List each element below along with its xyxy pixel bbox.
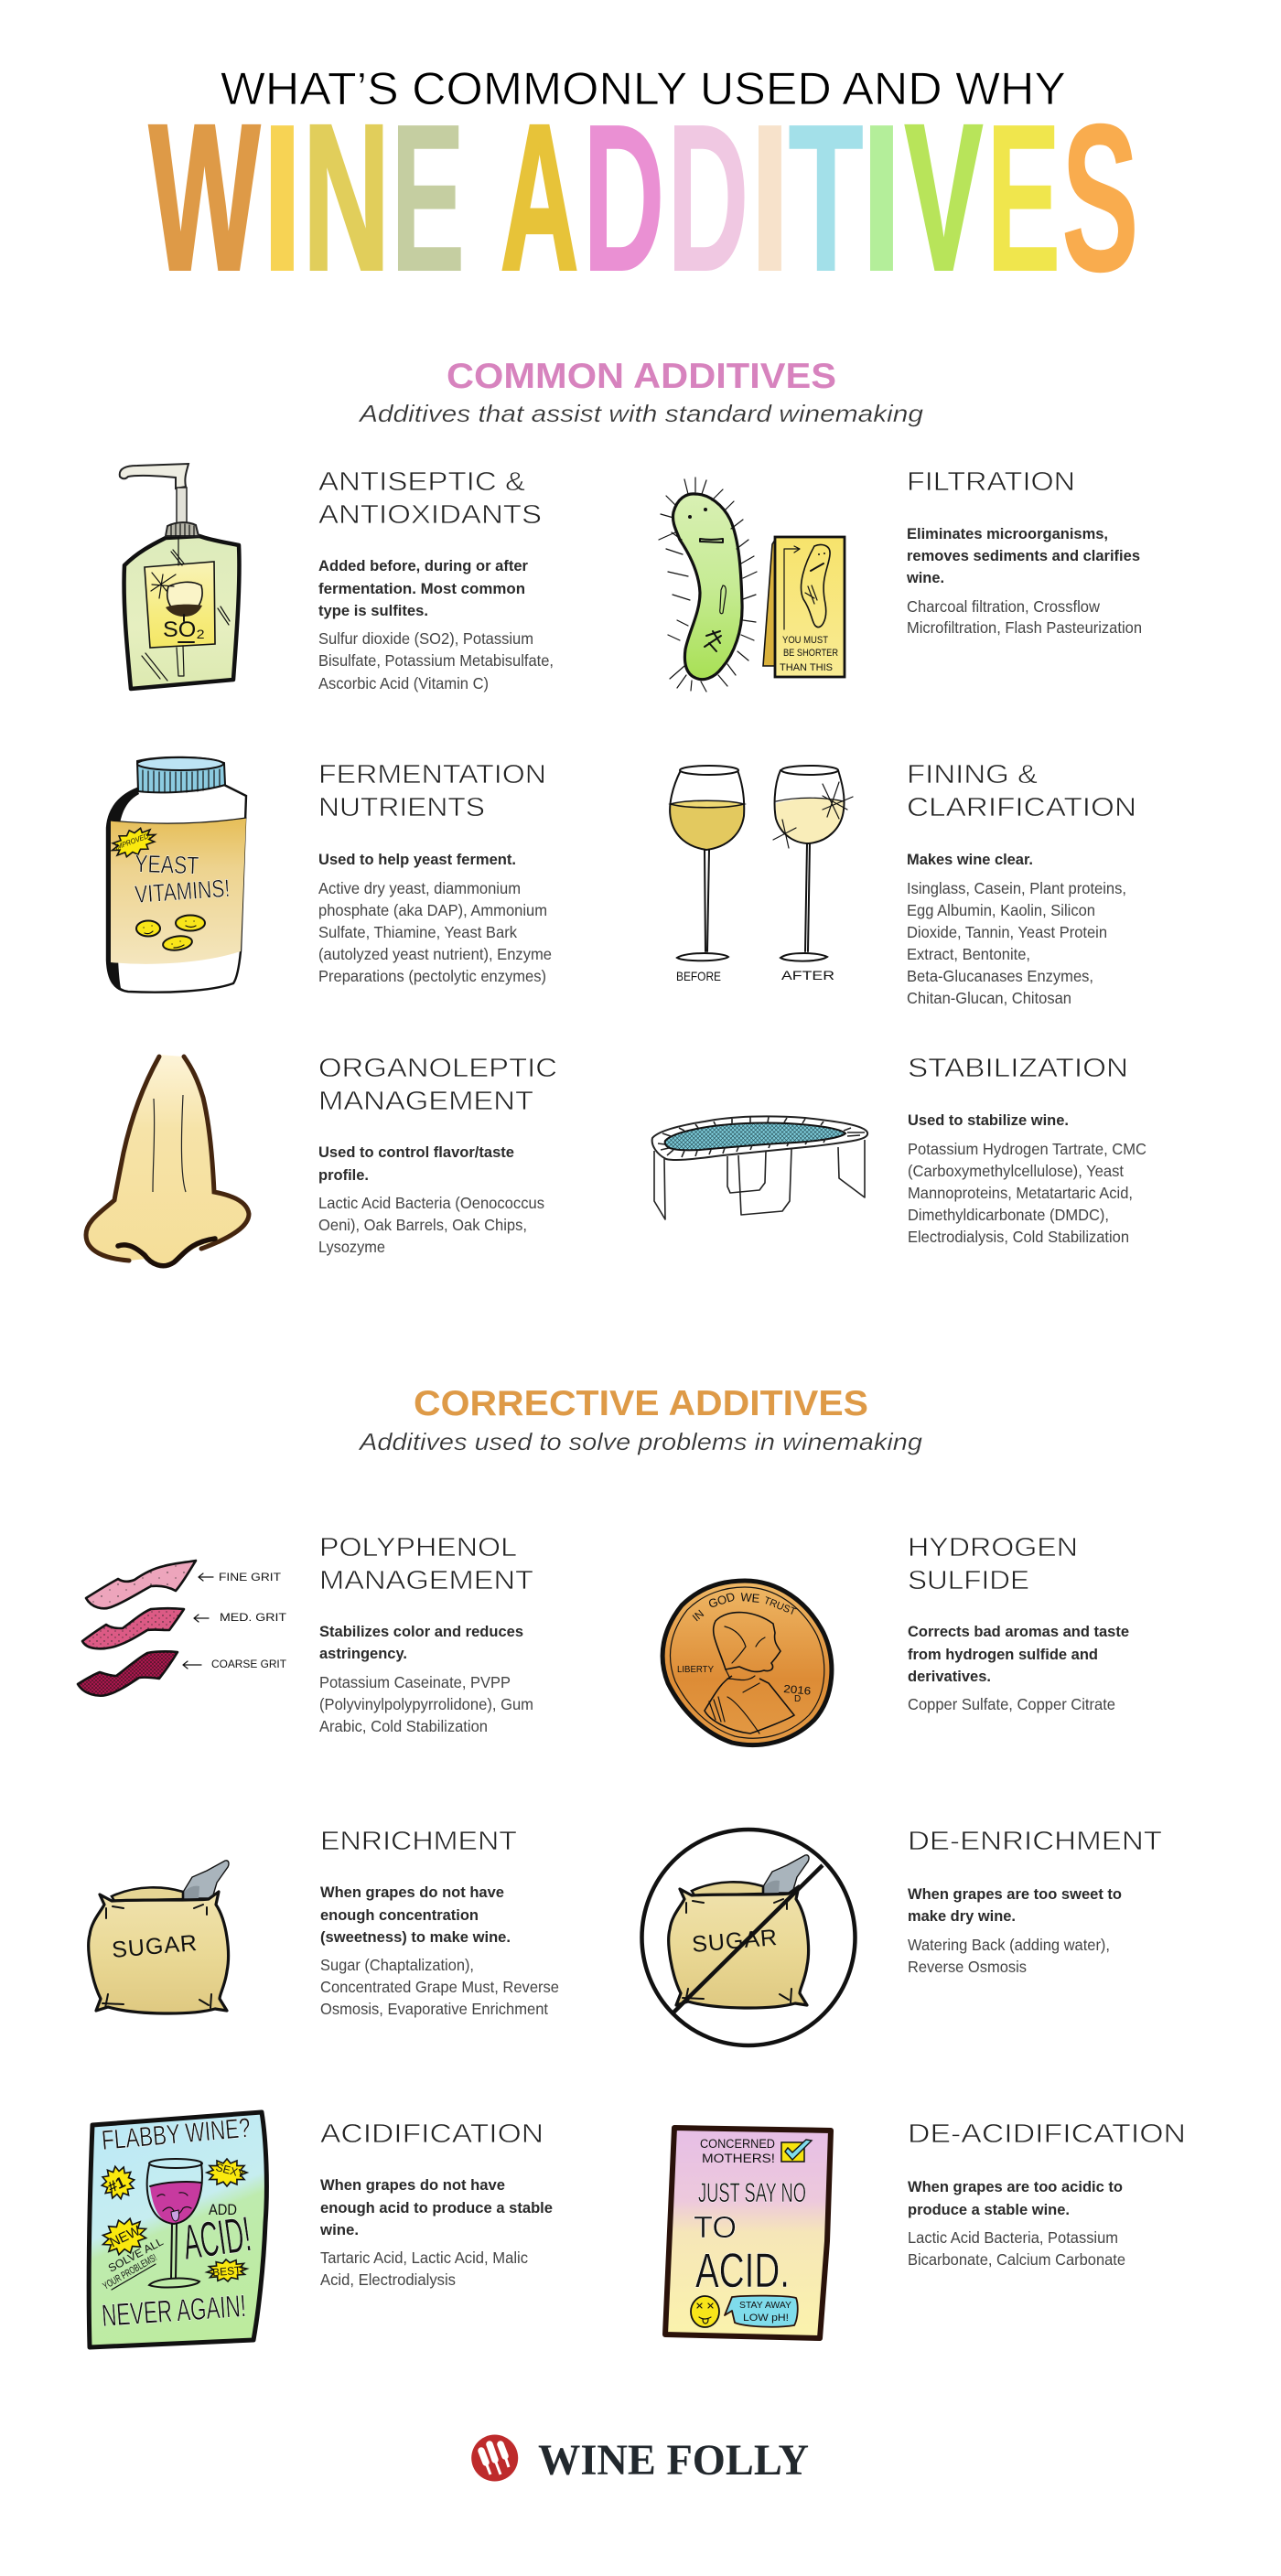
description: antiseptic and antioxidants: type is sulfites. <box>318 602 428 619</box>
icon: penny <box>662 1581 832 1745</box>
examples: fining and clarification: Egg Albumin, Kaolin, Silicon <box>907 901 1095 919</box>
icon: just say no to acid poster: MOTHERS! <box>702 2152 775 2165</box>
heading: polyphenol management: POLYPHENOL <box>319 1533 517 1562</box>
panel: de-enrichment <box>642 1827 1162 2045</box>
examples: fining and clarification: Dioxide, Tannin, Yeast Protein <box>907 923 1107 941</box>
heading: stabilization: STABILIZATION <box>908 1054 1128 1083</box>
examples: filtration: Charcoal filtration, Crossflow <box>907 597 1100 616</box>
examples: fining and clarification: Isinglass, Casein, Plant proteins, <box>907 879 1126 897</box>
description: enrichment: When grapes do not have <box>320 1884 504 1901</box>
description: acidification <box>319 2176 553 2238</box>
icon: flabby wine poster: ACID! <box>179 2206 254 2270</box>
examples: fining and clarification: Extract, Bentonite, <box>907 945 1030 963</box>
description: de-acidification: When grapes are too acidic to <box>908 2178 1123 2195</box>
description: stabilization: Used to stabilize wine. <box>908 1111 1069 1129</box>
description: acidification: wine. <box>319 2221 359 2238</box>
icon: wine glasses before and after <box>670 766 853 983</box>
icon: bacteria and height sign: BE SHORTER <box>783 648 838 659</box>
icon: penny: 2016 <box>783 1682 812 1698</box>
icon: penny: D <box>794 1694 801 1704</box>
examples: fermentation nutrients: Sulfate, Thiamine, Yeast Bark <box>318 923 517 941</box>
heading: fining and clarification: CLARIFICATION <box>907 793 1136 822</box>
title: wine additives rainbow letters: N <box>303 82 390 314</box>
logo: wine folly <box>471 2435 809 2485</box>
description: de-acidification: produce a stable wine. <box>908 2201 1070 2218</box>
examples: antiseptic and antioxidants <box>318 629 554 692</box>
description: filtration: wine. <box>906 569 944 586</box>
examples: acidification: Tartaric Acid, Lactic Acid, Malic <box>320 2249 528 2267</box>
description: acidification: When grapes do not have <box>320 2176 505 2194</box>
panel: enrichment <box>89 1827 559 2018</box>
icon: just say no to acid poster <box>665 2128 831 2338</box>
examples: fining and clarification: Beta-Glucanases Enzymes, <box>907 967 1093 985</box>
heading: fermentation nutrients: FERMENTATION <box>318 760 546 789</box>
heading: hydrogen sulfide: SULFIDE <box>908 1566 1029 1595</box>
title: wine additives rainbow letters <box>149 80 1139 317</box>
heading: de-enrichment: DE-ENRICHMENT <box>908 1827 1162 1856</box>
title: wine additives rainbow letters: E <box>391 81 465 317</box>
examples: de-acidification: Lactic Acid Bacteria, Potassium <box>908 2228 1118 2247</box>
examples: de-enrichment <box>908 1936 1110 1976</box>
description: de-acidification <box>908 2178 1123 2218</box>
examples: organoleptic management: Lysozyme <box>318 1238 385 1256</box>
examples: de-enrichment: Watering Back (adding water), <box>908 1936 1110 1954</box>
examples: antiseptic and antioxidants: Bisulfate, Potassium Metabisulfate, <box>318 651 554 670</box>
title: wine additives rainbow letters: D <box>667 80 749 317</box>
icon: flabby wine poster: FLABBY WINE? <box>101 2113 252 2156</box>
icon: bacteria and height sign <box>659 478 845 692</box>
icon: bacteria and height sign: YOU MUST <box>782 635 828 646</box>
icon: sandpaper grit strips <box>78 1561 287 1696</box>
examples: enrichment: Osmosis, Evaporative Enrichment <box>320 2000 548 2018</box>
title: wine additives rainbow letters: A <box>501 81 578 314</box>
heading: fermentation nutrients: NUTRIENTS <box>318 793 485 822</box>
description: polyphenol management: Stabilizes color and reduces <box>319 1623 523 1640</box>
description: hydrogen sulfide: Corrects bad aromas and taste <box>908 1623 1129 1640</box>
title: wine additives rainbow letters: I <box>260 80 305 317</box>
heading: hydrogen sulfide <box>908 1533 1078 1595</box>
examples: fining and clarification <box>907 879 1126 1007</box>
description: enrichment <box>320 1884 511 1946</box>
heading: polyphenol management: MANAGEMENT <box>319 1566 533 1595</box>
examples: de-acidification: Bicarbonate, Calcium Carbonate <box>908 2250 1125 2269</box>
examples: enrichment: Sugar (Chaptalization), <box>320 1956 474 1974</box>
examples: polyphenol management <box>319 1673 533 1735</box>
icon: penny: IN <box>690 1607 706 1624</box>
section heading: corrective additives: CORRECTIVE ADDITIVES <box>414 1384 868 1423</box>
icon: crossed-out sugar sack <box>642 1830 855 2045</box>
examples: stabilization: (Carboxymethylcellulose), Yeast <box>908 1162 1124 1180</box>
panel: stabilization <box>652 1054 1146 1246</box>
examples: antiseptic and antioxidants: Ascorbic Acid (Vitamin C) <box>318 674 489 692</box>
examples: acidification <box>320 2249 528 2289</box>
title: wine additives rainbow letters: W <box>149 82 260 314</box>
title: wine additives rainbow letters: S <box>1061 80 1139 317</box>
examples: enrichment: Concentrated Grape Must, Reverse <box>320 1978 559 1996</box>
icon: sandpaper grit strips: MED. GRIT <box>220 1611 287 1624</box>
description: hydrogen sulfide <box>908 1623 1129 1685</box>
icon: just say no to acid poster: TO <box>694 2210 737 2244</box>
icon: crossed-out sugar sack: SUGAR <box>691 1925 780 1958</box>
description: filtration: removes sediments and clarifies <box>907 547 1140 564</box>
examples: enrichment <box>320 1956 559 2018</box>
examples: polyphenol management: Potassium Caseinate, PVPP <box>319 1673 511 1691</box>
panel: acidification <box>89 2112 553 2347</box>
heading: organoleptic management <box>318 1054 557 1116</box>
icon: sandpaper grit strips: COARSE GRIT <box>211 1658 287 1670</box>
description: organoleptic management: profile. <box>318 1166 369 1184</box>
panel: polyphenol management <box>78 1533 533 1735</box>
icon: three bottles in red circle <box>471 2435 518 2481</box>
panel: filtration <box>659 467 1142 692</box>
wordmark: WINE FOLLY <box>538 2436 809 2485</box>
examples: fining and clarification: Chitan-Glucan, Chitosan <box>907 989 1071 1007</box>
examples: fermentation nutrients: Preparations (pectolytic enzymes) <box>318 967 546 985</box>
description: organoleptic management: Used to control flavor/taste <box>318 1143 514 1161</box>
heading: antiseptic and antioxidants: ANTISEPTIC & <box>318 467 525 497</box>
description: polyphenol management: astringency. <box>319 1645 407 1662</box>
heading: organoleptic management: MANAGEMENT <box>318 1087 533 1116</box>
examples: stabilization: Mannoproteins, Metatartaric Acid, <box>908 1184 1133 1202</box>
title: wine additives rainbow letters: D <box>583 80 665 317</box>
description: enrichment: (sweetness) to make wine. <box>320 1928 511 1946</box>
heading: polyphenol management <box>319 1533 533 1595</box>
examples: filtration <box>907 597 1142 637</box>
heading: de-acidification: DE-ACIDIFICATION <box>908 2120 1186 2149</box>
panel: fermentation nutrients <box>107 757 552 993</box>
examples: organoleptic management: Oeni), Oak Barrels, Oak Chips, <box>318 1216 527 1234</box>
icon: yeast vitamins bottle: VITAMINS! <box>134 875 231 908</box>
title: wine additives rainbow letters: T <box>788 80 864 317</box>
examples: organoleptic management <box>318 1194 544 1256</box>
heading: acidification: ACIDIFICATION <box>320 2120 544 2149</box>
icon: sandpaper grit strips: FINE GRIT <box>219 1571 282 1583</box>
icon: flabby wine poster: #1 <box>105 2174 128 2196</box>
icon: just say no to acid poster: CONCERNED <box>700 2137 775 2151</box>
heading: enrichment: ENRICHMENT <box>320 1827 517 1856</box>
panel: organoleptic management <box>86 1054 557 1267</box>
description: antiseptic and antioxidants: fermentation. Most common <box>318 580 525 597</box>
description: de-enrichment: make dry wine. <box>908 1907 1016 1925</box>
examples: de-acidification <box>908 2228 1125 2269</box>
examples: hydrogen sulfide: Copper Sulfate, Copper Citrate <box>908 1695 1115 1713</box>
icon: pump bottle: SO₂ <box>163 617 205 642</box>
icon: just say no to acid poster: ACID. <box>695 2244 790 2298</box>
title: wine additives rainbow letters: I <box>859 80 904 317</box>
examples: de-enrichment: Reverse Osmosis <box>908 1958 1027 1976</box>
icon: penny: GOD <box>706 1589 737 1611</box>
description: filtration: Eliminates microorganisms, <box>907 525 1108 542</box>
section subtitle: common additives: Additives that assist with standard winemaking <box>358 400 924 427</box>
examples: filtration: Microfiltration, Flash Pasteurization <box>907 618 1142 637</box>
title: wine additives rainbow letters: I <box>748 80 792 317</box>
icon: pump bottle <box>120 464 239 689</box>
icon: yeast vitamins bottle <box>107 757 246 993</box>
icon: flabby wine poster: NEVER AGAIN! <box>101 2289 247 2334</box>
description: acidification: enough acid to produce a stable <box>320 2199 553 2216</box>
description: organoleptic management <box>318 1143 514 1184</box>
examples: stabilization: Dimethyldicarbonate (DMDC), <box>908 1206 1109 1224</box>
description: filtration <box>906 525 1140 586</box>
heading: organoleptic management: ORGANOLEPTIC <box>318 1054 557 1083</box>
icon: just say no to acid poster: JUST SAY NO <box>698 2178 806 2208</box>
icon: trampoline <box>652 1116 867 1219</box>
examples: polyphenol management: Arabic, Cold Stabilization <box>319 1717 488 1735</box>
icon: sugar sack <box>89 1861 229 2013</box>
panel: hydrogen sulfide <box>662 1533 1129 1745</box>
examples: fermentation nutrients: phosphate (aka DAP), Ammonium <box>318 901 547 919</box>
icon: wine glasses before and after: BEFORE <box>676 969 721 983</box>
icon: flabby wine poster: SOLVE ALL <box>106 2235 166 2275</box>
panel: fining and clarification <box>670 760 1136 1007</box>
examples: acidification: Acid, Electrodialysis <box>320 2270 456 2289</box>
examples: stabilization: Potassium Hydrogen Tartrate, CMC <box>908 1140 1146 1158</box>
icon: flabby wine poster: ADD <box>209 2201 237 2218</box>
examples: polyphenol management: (Polyvinylpolypyrrolidone), Gum <box>319 1695 533 1713</box>
examples: organoleptic management: Lactic Acid Bacteria (Oenococcus <box>318 1194 544 1212</box>
icon: flabby wine poster: NEW <box>107 2223 144 2250</box>
examples: fermentation nutrients: (autolyzed yeast nutrient), Enzyme <box>318 945 552 963</box>
panel: de-acidification <box>665 2120 1186 2338</box>
icon: flabby wine poster <box>89 2112 266 2347</box>
description: hydrogen sulfide: derivatives. <box>908 1668 991 1685</box>
heading: antiseptic and antioxidants: ANTIOXIDANTS <box>318 500 542 530</box>
panel: antiseptic and antioxidants <box>120 464 554 692</box>
heading: fining and clarification <box>907 760 1136 822</box>
description: hydrogen sulfide: from hydrogen sulfide and <box>908 1646 1098 1663</box>
heading: filtration: FILTRATION <box>907 467 1075 497</box>
heading: fermentation nutrients <box>318 760 546 822</box>
examples: antiseptic and antioxidants: Sulfur dioxide (SO2), Potassium <box>318 629 533 648</box>
section subtitle: corrective additives: Additives used to solve problems in winemaking <box>358 1428 923 1455</box>
description: de-enrichment <box>908 1885 1122 1925</box>
title: wine additives rainbow letters: E <box>986 81 1060 317</box>
examples: fermentation nutrients <box>318 879 552 985</box>
heading: fining and clarification: FINING & <box>907 760 1038 789</box>
icon: yeast vitamins bottle: YEAST <box>135 850 199 879</box>
icon: penny: LIBERTY <box>677 1665 714 1675</box>
icon: just say no to acid poster: STAY AWAY <box>739 2300 791 2311</box>
icon: flabby wine poster: SEXY <box>214 2161 246 2181</box>
icon: penny: WE <box>740 1590 760 1605</box>
description: fining and clarification: Makes wine clear. <box>907 851 1033 868</box>
icon: flabby wine poster: BEST! <box>212 2263 244 2279</box>
heading: antiseptic and antioxidants <box>318 467 542 530</box>
icon: just say no to acid poster: LOW pH! <box>743 2313 789 2324</box>
icon: yeast vitamins bottle: IMPROVED! <box>114 832 152 852</box>
description: fermentation nutrients: Used to help yeast ferment. <box>318 851 516 868</box>
title: what's commonly used and why: WHAT’S COMMONLY USED AND WHY <box>221 63 1066 114</box>
icon: nose <box>86 1055 249 1267</box>
section heading: common additives: COMMON ADDITIVES <box>447 357 836 396</box>
title: wine additives rainbow letters: V <box>905 80 983 313</box>
description: de-enrichment: When grapes are too sweet to <box>908 1885 1122 1903</box>
description: antiseptic and antioxidants: Added before, during or after <box>318 557 528 574</box>
icon: penny: TRUST <box>762 1595 798 1618</box>
icon: flabby wine poster: YOUR PROBLEMS! <box>101 2252 159 2292</box>
description: polyphenol management <box>319 1623 523 1662</box>
examples: stabilization <box>908 1140 1146 1246</box>
description: enrichment: enough concentration <box>320 1906 479 1924</box>
examples: fermentation nutrients: Active dry yeast, diammonium <box>318 879 521 897</box>
icon: sugar sack: SUGAR <box>111 1930 200 1963</box>
examples: stabilization: Electrodialysis, Cold Stabilization <box>908 1228 1129 1246</box>
icon: bacteria and height sign: THAN THIS <box>780 662 833 673</box>
icon: wine glasses before and after: AFTER <box>781 968 834 982</box>
heading: hydrogen sulfide: HYDROGEN <box>908 1533 1078 1562</box>
description: antiseptic and antioxidants <box>318 557 528 619</box>
